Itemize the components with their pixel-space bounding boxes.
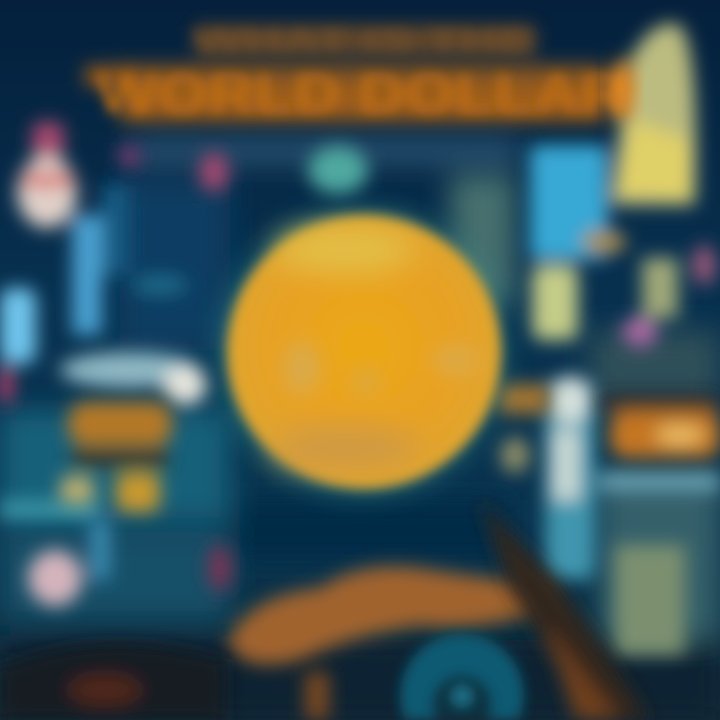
right orange machine bbox=[497, 384, 720, 473]
bottom dark shapes bbox=[0, 500, 650, 720]
title upper line: WHAT IS THE bbox=[194, 25, 534, 55]
title main line: WORLD DOLLAR bbox=[97, 64, 627, 124]
coin halo bbox=[220, 210, 504, 494]
bitcoin coin bbox=[227, 215, 501, 489]
right towers bbox=[530, 23, 720, 655]
hand bbox=[228, 566, 550, 664]
left machine orange stack bbox=[28, 402, 232, 606]
top neon signs bbox=[119, 145, 368, 295]
coin symbol marks bbox=[286, 342, 318, 394]
title bbox=[85, 26, 605, 122]
left tower bbox=[17, 122, 130, 335]
coin lower shading bbox=[270, 426, 420, 470]
right title accent bbox=[610, 60, 634, 120]
coin top highlight bbox=[275, 228, 415, 272]
left edge glow bbox=[0, 288, 207, 518]
teal gauge bbox=[400, 634, 524, 720]
